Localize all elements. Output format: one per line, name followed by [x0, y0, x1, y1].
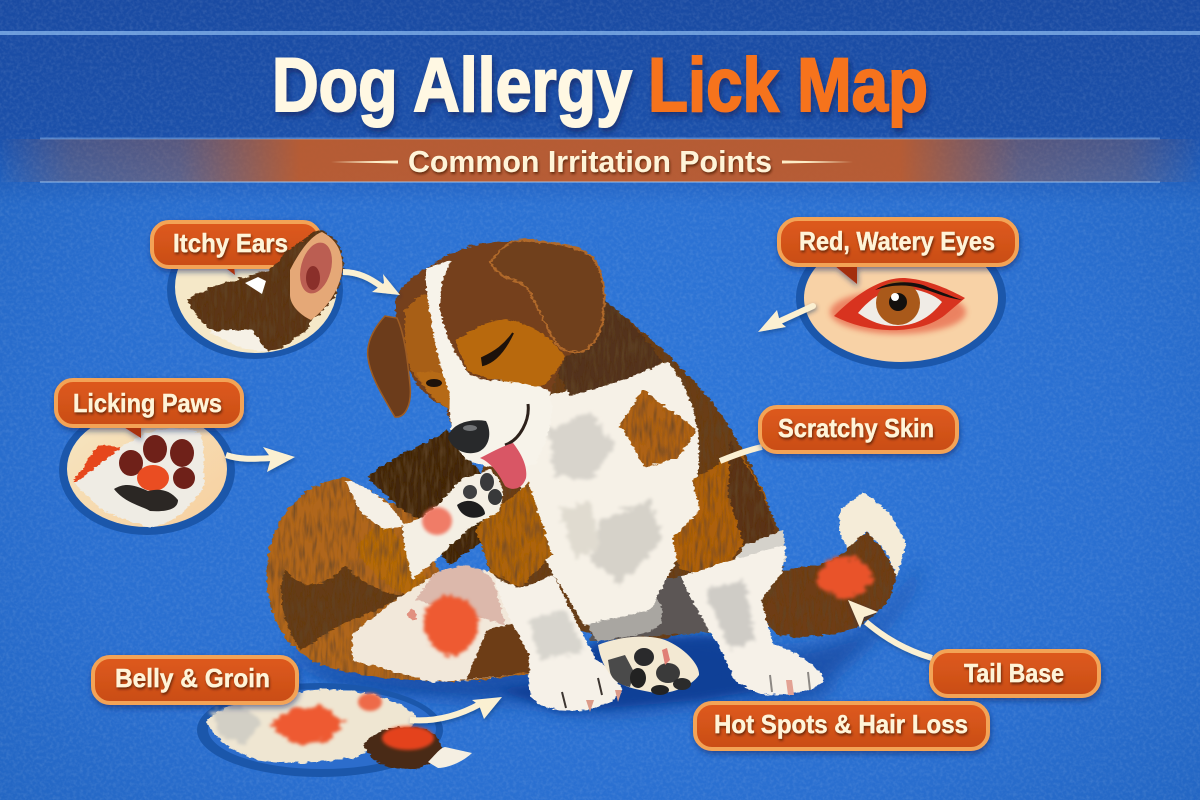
- eye white: [858, 288, 942, 326]
- label: red watery eyes: [779, 219, 1017, 284]
- eye upper lid: [834, 278, 965, 330]
- ear vignette ring: [167, 221, 343, 359]
- arrow: tail base: [848, 600, 932, 658]
- ear pink canal: [295, 239, 337, 297]
- dog: rear leg and foot: [681, 545, 824, 694]
- title: Lick Map: [648, 43, 928, 128]
- belly fur: [206, 689, 416, 763]
- dog: raised paw leg: [403, 470, 503, 580]
- dog: raised knee white: [345, 480, 405, 530]
- title: Dog Allergy: [272, 43, 632, 128]
- dog: nose highlight: [463, 425, 477, 431]
- title: [272, 43, 928, 128]
- belly vignette inner: [208, 689, 436, 769]
- eye pupil: [889, 293, 907, 311]
- connector: scratchy skin: [720, 447, 762, 461]
- dog: back and body: [367, 298, 785, 645]
- eye redness: [830, 290, 966, 334]
- dog: second eye: [426, 379, 442, 387]
- subtitle band: Common Irritation Points: [408, 144, 772, 179]
- paw vignette background: [67, 411, 227, 527]
- ear vignette white spot: [245, 277, 266, 294]
- ear vignette fur: [187, 230, 343, 352]
- belly hot spot small: [358, 693, 382, 711]
- label: itchy ears: [152, 222, 320, 275]
- tail fur dark: [363, 727, 442, 770]
- arrow: paws to dog: [226, 447, 295, 472]
- belly grey fur: [212, 705, 262, 745]
- ear dark canal: [306, 266, 320, 290]
- label: hot spots and hair loss: Hot Spots & Hair Loss: [714, 709, 968, 739]
- label: belly and groin: Belly & Groin: [115, 663, 270, 693]
- paw black pad: [114, 485, 178, 511]
- ear vignette background: [175, 221, 337, 353]
- dog: belly and groin: [352, 566, 532, 682]
- label: hot spots and hair loss: [695, 703, 988, 749]
- label: tail base: Tail Base: [964, 658, 1064, 688]
- subtitle band: [0, 138, 1200, 183]
- paw red fur: [73, 445, 120, 485]
- label: scratchy skin: [760, 407, 957, 452]
- dog illustration: [267, 240, 906, 712]
- vignette: belly and groin: [197, 683, 472, 777]
- dog: raised paw pads: [457, 473, 502, 518]
- belly vignette ring: [197, 683, 443, 777]
- label: tail base: [931, 651, 1099, 696]
- eye vignette ring: [796, 227, 1006, 369]
- label: itchy ears: Itchy Ears: [173, 228, 288, 258]
- arrow: eyes to dog: [758, 306, 813, 332]
- dog: brown fur patches: [475, 300, 775, 587]
- dog: toes and claws: [562, 672, 810, 712]
- eye iris: [876, 281, 920, 325]
- arrow: belly to dog: [410, 697, 502, 720]
- dog: under belly shade: [584, 570, 722, 642]
- dog: hind hip grey: [735, 530, 786, 600]
- dog: sole of hind paw: [598, 637, 699, 695]
- dog: mouth: [505, 404, 528, 445]
- eye highlight: [891, 293, 899, 301]
- dog: tail: [757, 492, 906, 637]
- vignette: licking paws: [59, 405, 235, 535]
- dog: irritated spot on foreleg: [422, 507, 452, 535]
- vignette: red watery eyes: [796, 227, 1006, 369]
- paw vignette ring: [59, 405, 235, 535]
- dog: closed eye: [482, 333, 513, 365]
- dog: right ear: [490, 240, 604, 352]
- label: belly and groin: [93, 657, 297, 703]
- arrow: ears to dog: [343, 272, 400, 295]
- label: red watery eyes: Red, Watery Eyes: [799, 226, 995, 256]
- vignette: itchy ears background: [167, 221, 343, 359]
- eye lash line: [875, 282, 963, 300]
- dog: chest grey patches: [548, 412, 662, 585]
- dog: left ear: [368, 316, 410, 417]
- tail white tip: [428, 747, 472, 768]
- dog: nose: [448, 420, 489, 453]
- label: licking paws: [56, 380, 242, 438]
- dog: haunch: [267, 478, 535, 681]
- dog: chest white: [520, 362, 702, 625]
- dog: front leg: [494, 575, 622, 710]
- ear vignette white fur: [208, 329, 267, 352]
- ear inner: [290, 232, 342, 320]
- tail hot spot: [382, 726, 434, 750]
- paw fur: [74, 428, 204, 527]
- paw pads: [119, 435, 195, 489]
- dog: head: [395, 241, 590, 468]
- dog: belly hot spot: [424, 595, 478, 655]
- dog: tongue: [480, 443, 526, 489]
- paw red centre: [137, 465, 169, 491]
- label: scratchy skin: Scratchy Skin: [778, 413, 934, 443]
- top decorative line: [0, 31, 1200, 35]
- belly hot spot large: [270, 706, 345, 745]
- vignette: ear artwork: [187, 230, 343, 352]
- eye vignette skin: [804, 234, 998, 362]
- label: licking paws: Licking Paws: [73, 388, 222, 418]
- dog ground shadow: [285, 560, 925, 714]
